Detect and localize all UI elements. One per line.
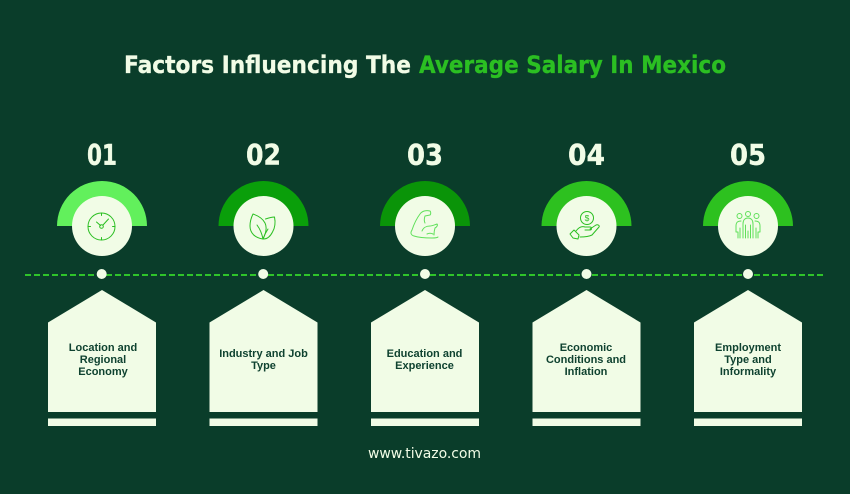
icon circle: arm — [395, 196, 455, 256]
label 05: Informality — [720, 366, 777, 378]
semicircle 02 — [218, 181, 308, 226]
title: Factors Influencing The — [124, 51, 411, 79]
base bar 05 — [694, 418, 802, 426]
label 01: Economy — [78, 366, 129, 378]
base bar 02 — [210, 418, 318, 426]
number 02: 02 — [246, 139, 281, 172]
title: Average Salary In Mexico — [419, 51, 726, 79]
label 01: Regional — [80, 354, 126, 366]
icon circle: leaf — [234, 196, 294, 256]
base bar 01 — [48, 418, 156, 426]
label 04: Economic — [560, 342, 612, 354]
icon: dollar sign: $ — [585, 213, 590, 223]
title — [124, 51, 726, 79]
icon circle: clock — [72, 196, 132, 256]
label 02: Type — [251, 360, 276, 372]
semicircle 05 — [703, 181, 793, 226]
semicircle 03 — [380, 181, 470, 226]
step 05: employment — [694, 139, 802, 426]
dot 04 — [582, 269, 592, 279]
semicircle 04 — [542, 181, 632, 226]
dot 02 — [258, 269, 268, 279]
label 02: Industry and Job — [219, 348, 308, 360]
house card 04 — [532, 290, 640, 412]
base bar 04 — [532, 418, 640, 426]
semicircle 01 — [57, 181, 147, 226]
step 04: economy — [532, 139, 640, 426]
step 03: education — [371, 139, 479, 426]
label 05: Employment — [715, 342, 781, 354]
label 03: Education and — [387, 348, 462, 360]
house card 05 — [694, 290, 802, 412]
step 02: industry — [210, 139, 318, 426]
number 03: 03 — [407, 139, 443, 172]
icon circle: coin in hand — [556, 196, 616, 256]
label 04: Conditions and — [546, 354, 626, 366]
house card 01 — [48, 290, 156, 412]
base bar 03 — [371, 418, 479, 426]
label 03: Experience — [395, 360, 454, 372]
label 01: Location and — [69, 342, 137, 354]
dot 03 — [420, 269, 430, 279]
icon circle: people — [718, 196, 778, 256]
step 01: location — [48, 139, 156, 426]
website footer: www.tivazo.com — [368, 446, 481, 462]
dot 01 — [97, 269, 107, 279]
number 01: 01 — [87, 139, 117, 172]
number 04: 04 — [568, 139, 605, 172]
house card 02 — [210, 290, 318, 412]
dot 05 — [743, 269, 753, 279]
house card 03 — [371, 290, 479, 412]
label 05: Type and — [724, 354, 772, 366]
number 05: 05 — [730, 139, 766, 172]
label 04: Inflation — [565, 366, 608, 378]
